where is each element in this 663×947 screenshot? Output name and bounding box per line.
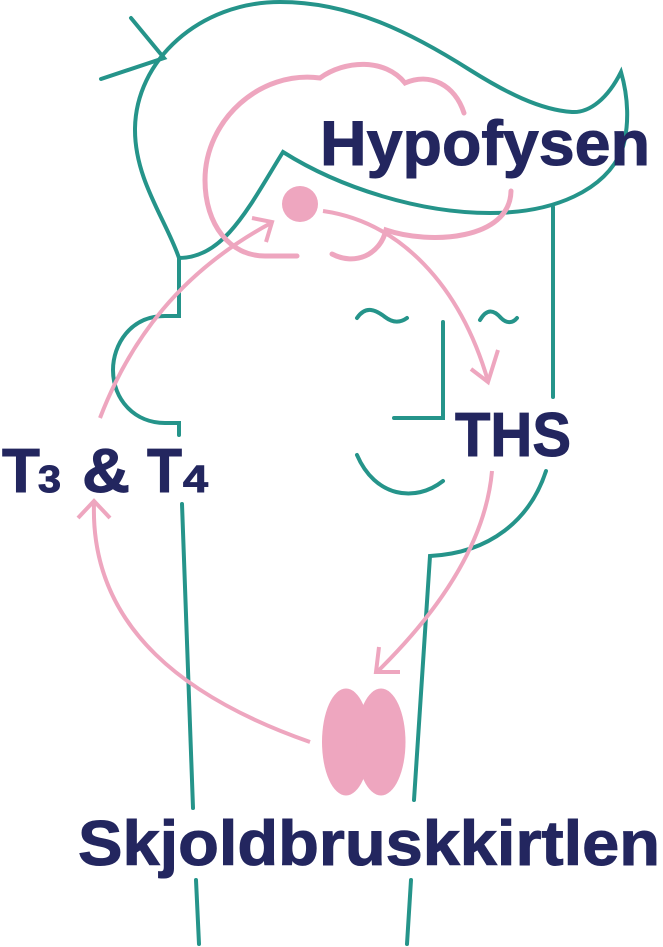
arrow: T3 and T4 to pituitary bbox=[100, 218, 272, 418]
hair tuft bbox=[101, 18, 164, 79]
label: T3 & T4: T bbox=[2, 437, 40, 506]
label: Skjoldbruskkirtlen: Skjoldbruskkirtlen bbox=[78, 809, 660, 879]
mouth bbox=[357, 455, 443, 494]
label: Hypofysen: Hypofysen bbox=[320, 109, 650, 179]
jaw and throat right bbox=[414, 471, 546, 800]
right eyebrow bbox=[480, 312, 517, 322]
left eyebrow bbox=[357, 310, 407, 322]
back of head line bbox=[551, 207, 555, 397]
neck and ear bbox=[113, 258, 179, 435]
thyroid gland bbox=[322, 688, 406, 796]
pituitary gland dot bbox=[282, 186, 318, 222]
head outline bbox=[101, 2, 627, 944]
throat lower right bbox=[407, 880, 411, 944]
brain outline bbox=[205, 64, 511, 259]
label: T3 & T4: 3 bbox=[38, 459, 61, 501]
throat lower left bbox=[196, 880, 199, 944]
label: T3 & T4: 4 bbox=[183, 459, 208, 501]
label: T3 & T4: & bbox=[82, 437, 130, 506]
arrow: thyroid to T3 and T4 bbox=[78, 501, 310, 742]
label: T3 & T4: T bbox=[147, 437, 182, 506]
throat left bbox=[182, 504, 193, 808]
label: THS: THS bbox=[455, 401, 571, 470]
arrow: THS to thyroid bbox=[376, 471, 492, 672]
arrow: pituitary to THS bbox=[323, 211, 498, 382]
nose bbox=[394, 322, 443, 418]
